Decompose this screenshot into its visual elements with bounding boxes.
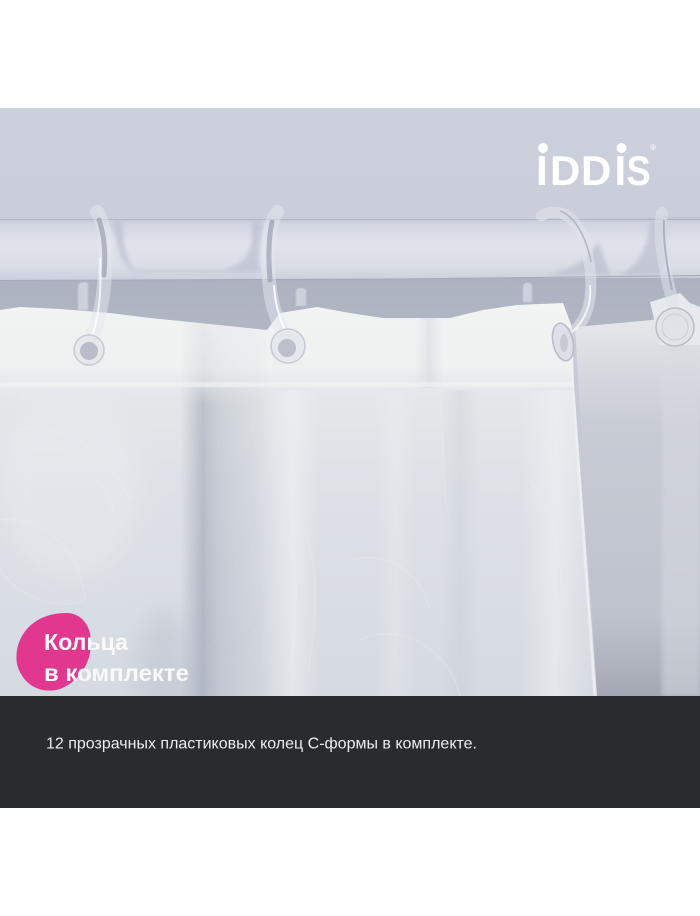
logo: iddis: IDDI — [536, 147, 626, 194]
heading: rings included — [46, 634, 188, 681]
embossed leaf pattern — [0, 320, 562, 696]
wall fabric background — [0, 108, 700, 696]
hem line — [0, 382, 600, 387]
ring 2 — [268, 212, 305, 363]
heading: rings included: Кольца — [44, 629, 128, 655]
plastic hook pegs behind curtain — [78, 282, 532, 310]
back curtain panel — [575, 293, 700, 696]
soft vertical light and dark bands — [17, 318, 570, 696]
logo: iddis — [538, 143, 656, 186]
heading: rings included: в комплекте — [44, 660, 189, 686]
pink blob accent — [16, 613, 91, 691]
curtain rod — [0, 217, 700, 281]
logo: iddis: ® — [650, 143, 656, 152]
torn top tab — [650, 293, 700, 345]
ring 1 — [74, 212, 105, 365]
photo: shower curtain on rod with rings — [0, 108, 700, 750]
ring shadows on rod — [112, 222, 665, 275]
logo: iddis: S — [626, 149, 651, 195]
ring 4 — [656, 213, 694, 346]
front curtain panel — [0, 303, 597, 696]
front curtain edge highlight — [572, 388, 596, 696]
ring 3 — [541, 211, 591, 363]
infographic canvas — [0, 108, 700, 808]
caption text: 12 прозрачных пластиковых колец С-формы в комплекте. — [46, 736, 477, 752]
shadow band under rod — [0, 278, 700, 338]
dark caption bar — [0, 696, 700, 808]
main fold shadow — [184, 323, 259, 696]
